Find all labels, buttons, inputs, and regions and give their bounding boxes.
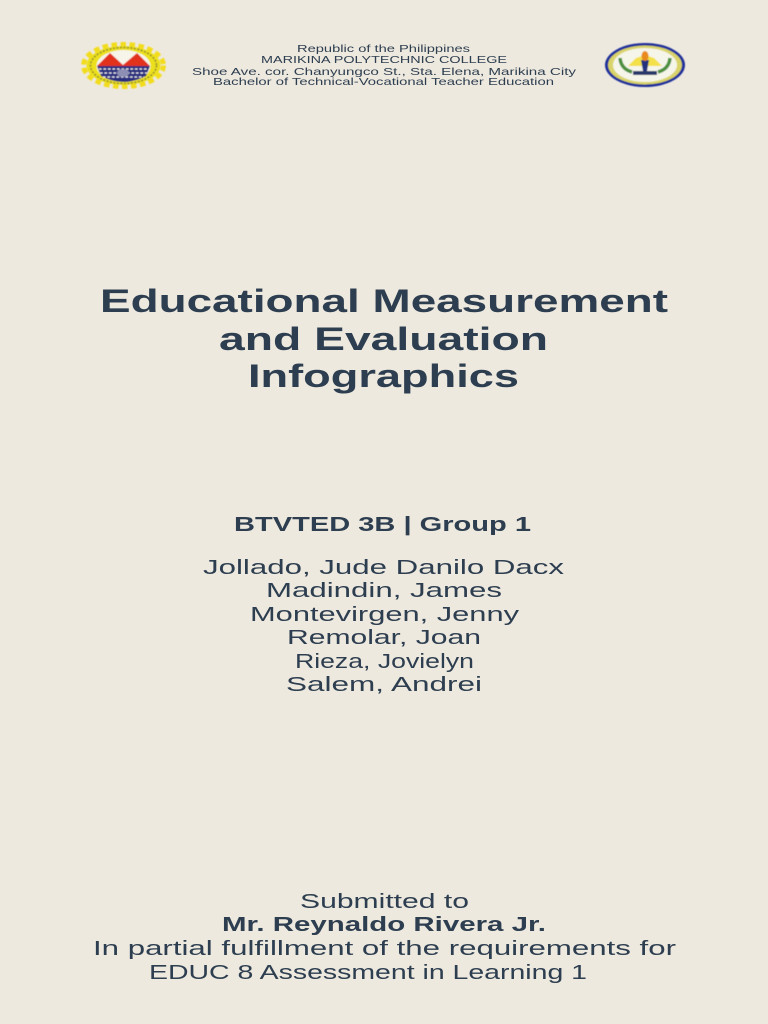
submission note: Submitted to (300, 891, 469, 913)
header text block: Shoe Ave. cor. Chanyungco St., Sta. Elena, Marikina City (192, 66, 577, 78)
title (100, 283, 668, 394)
group member names: Montevirgen, Jenny (250, 604, 519, 626)
header text block (192, 43, 577, 88)
group member names: Remolar, Joan (287, 627, 481, 649)
group member names: Madindin, James (266, 580, 502, 602)
title: Infographics (248, 358, 519, 394)
submission note: EDUC 8 Assessment in Learning 1 (149, 962, 587, 984)
title: and Evaluation (219, 321, 548, 357)
title: Educational Measurement (100, 283, 668, 319)
submission note: Mr. Reynaldo Rivera Jr. (222, 914, 546, 936)
group member names (203, 557, 564, 696)
group member names: Jollado, Jude Danilo Dacx (203, 557, 564, 579)
header text block: Bachelor of Technical-Vocational Teacher Education (213, 76, 554, 88)
icon: Marikina Polytechnic College gear logo (84, 44, 164, 86)
icon: BTVTEd oval logo (605, 43, 685, 87)
header text block: Republic of the Philippines (297, 43, 470, 55)
header text block: MARIKINA POLYTECHNIC COLLEGE (261, 54, 507, 66)
group member names: Rieza, Jovielyn (295, 651, 474, 673)
submission note: In partial fulfillment of the requirements for (93, 938, 677, 960)
group member names: Salem, Andrei (286, 674, 482, 696)
group heading: BTVTED 3B | Group 1 (234, 514, 531, 536)
submission note (93, 891, 677, 984)
